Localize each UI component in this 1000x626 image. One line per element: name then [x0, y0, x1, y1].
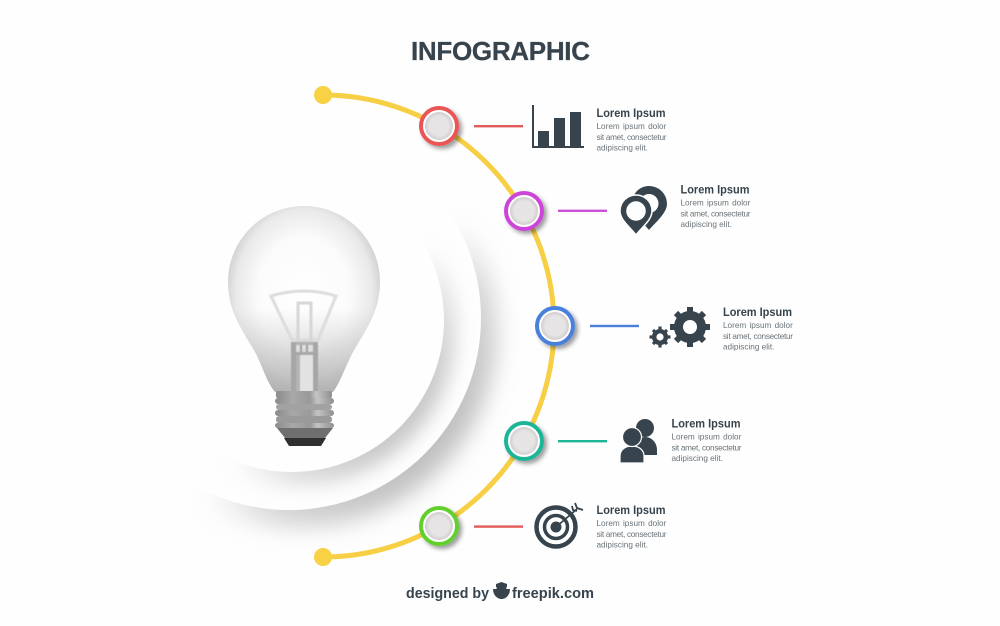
yellow arc timeline [314, 86, 554, 566]
node 5: green [421, 508, 457, 544]
connector 4 [558, 440, 607, 442]
bulb glass [228, 206, 380, 392]
text block 4: adipiscing elit. [672, 454, 723, 463]
text block 4 [672, 416, 742, 463]
icon: target [536, 503, 583, 546]
text block 5: adipiscing elit. [596, 540, 648, 550]
connector 5 [474, 525, 523, 528]
text block 1: Lorem ipsum dolor [596, 122, 667, 131]
text block 5 [596, 503, 667, 550]
connector 1 [474, 125, 523, 127]
node 4: teal [506, 423, 542, 459]
swirl shadows behind bulb [97, 126, 496, 526]
text block 1 [596, 106, 667, 152]
title: INFOGRAPHIC [411, 36, 590, 66]
text block 4: Lorem ipsum dolor [672, 432, 742, 442]
node 1: red [421, 108, 457, 144]
icon: freepik logo [493, 582, 510, 599]
text block 2: adipiscing elit. [680, 220, 732, 229]
text block 3: sit amet, consectetur [723, 332, 793, 341]
text block 5: Lorem Ipsum [596, 503, 666, 517]
footer credit [406, 582, 594, 602]
text block 1: Lorem Ipsum [596, 106, 666, 120]
icon: gears [650, 307, 710, 348]
text block 3: adipiscing elit. [723, 342, 774, 352]
text block 4: Lorem Ipsum [672, 416, 740, 430]
text block 2: Lorem Ipsum [680, 182, 750, 196]
node 3: blue [537, 308, 573, 344]
bulb tip [284, 438, 326, 446]
connector 2 [558, 210, 607, 212]
node 2: purple [506, 193, 542, 229]
connector 3 [590, 325, 639, 327]
icon: people [620, 419, 657, 463]
text block 1: sit amet, consectetur [596, 133, 667, 142]
text block 5: sit amet, consectetur [596, 530, 667, 539]
screw base [276, 391, 332, 398]
icon: map pins [620, 186, 667, 235]
text block 5: Lorem ipsum dolor [596, 519, 667, 528]
filament [271, 291, 336, 392]
icon: bar chart [532, 105, 584, 148]
text block 2: Lorem ipsum dolor [680, 198, 751, 208]
text block 1: adipiscing elit. [596, 144, 648, 152]
light bulb [228, 206, 380, 446]
text block 2: sit amet, consectetur [680, 210, 751, 218]
text block 3: Lorem ipsum dolor [723, 321, 793, 330]
footer credit: designed by [406, 585, 490, 602]
footer credit: freepik.com [512, 585, 594, 602]
text block 4: sit amet, consectetur [672, 444, 742, 452]
text block 2 [680, 182, 751, 229]
text block 3 [723, 305, 793, 352]
text block 3: Lorem Ipsum [723, 305, 792, 319]
